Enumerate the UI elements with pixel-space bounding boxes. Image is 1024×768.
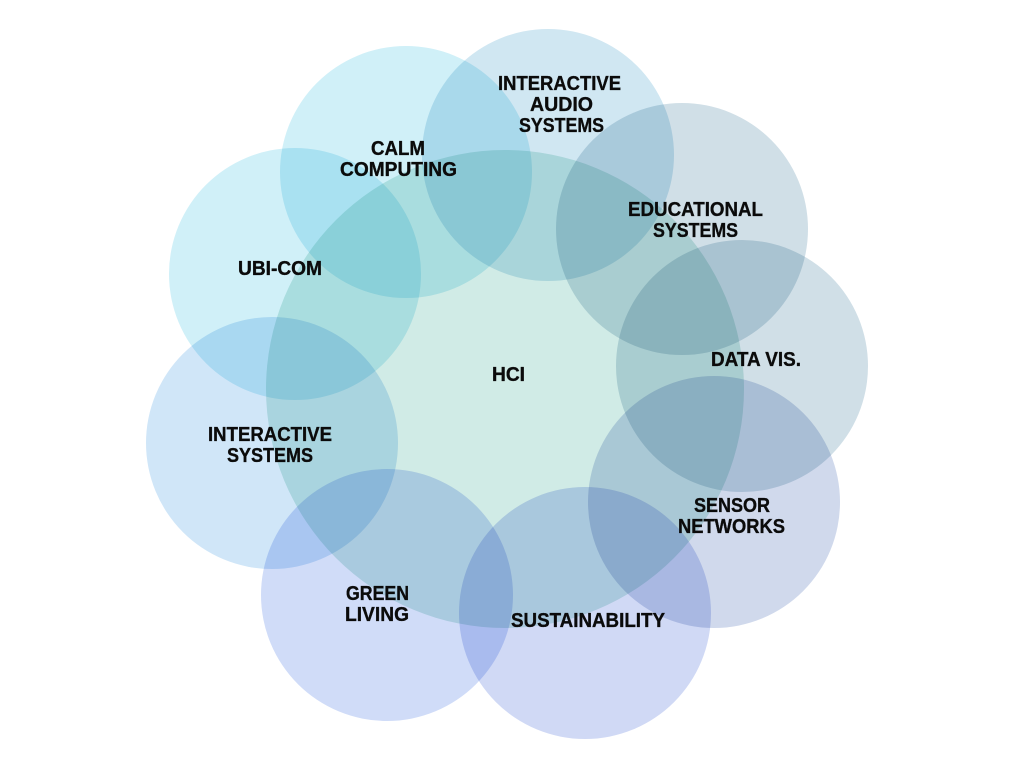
circle: interactive audio systems <box>422 29 674 281</box>
circle: ubi-com: UBI-COM <box>238 258 322 280</box>
circle: calm computing: CALM <box>371 138 425 160</box>
circle: educational systems: EDUCATIONAL <box>628 199 763 221</box>
circle: calm computing: COMPUTING <box>340 159 457 181</box>
circle: sensor networks: NETWORKS <box>678 516 785 538</box>
circle: interactive systems: INTERACTIVE <box>208 424 332 446</box>
circle: green living: LIVING <box>345 604 409 626</box>
circle: data vis <box>616 240 868 492</box>
circle: ubi-com <box>169 148 421 400</box>
circle: sustainability: SUSTAINABILITY <box>511 610 666 632</box>
circle: educational systems <box>556 103 808 355</box>
circle: HCI <box>266 150 744 628</box>
circle: interactive audio systems: AUDIO <box>530 94 593 116</box>
circle: interactive systems <box>146 317 398 569</box>
circle: HCI: HCI <box>492 364 525 386</box>
circle: data vis: DATA VIS. <box>711 349 801 371</box>
circle: interactive audio systems: SYSTEMS <box>519 115 604 137</box>
circle: sustainability <box>459 487 711 739</box>
circle: sensor networks: SENSOR <box>694 495 770 517</box>
circle: interactive systems: SYSTEMS <box>227 445 313 467</box>
circle: sensor networks <box>588 376 840 628</box>
circle: green living <box>261 469 513 721</box>
circle: interactive audio systems: INTERACTIVE <box>498 73 621 95</box>
circle: educational systems: SYSTEMS <box>653 220 738 242</box>
circle: calm computing <box>280 46 532 298</box>
circle: green living: GREEN <box>346 583 409 605</box>
